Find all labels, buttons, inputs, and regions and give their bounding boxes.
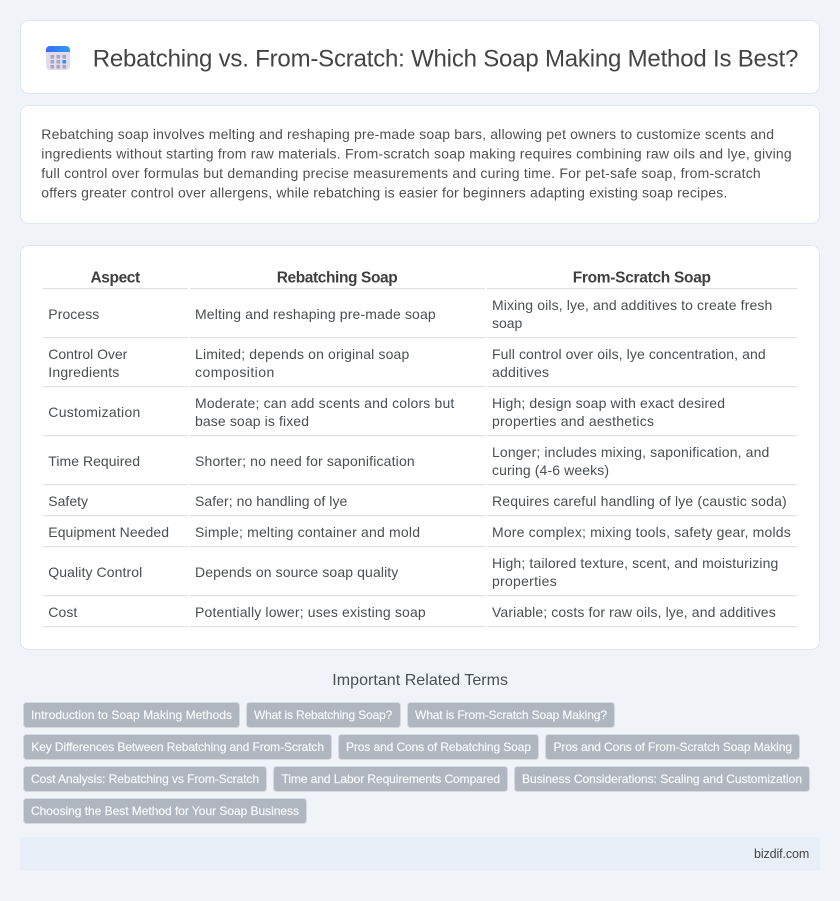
row: control over ingredients bbox=[48, 346, 766, 380]
row: customization: Moderate; can add scents and colors but bbox=[195, 395, 454, 411]
row: control over ingredients: Full control over oils, lye concentration, and bbox=[492, 346, 766, 362]
table header row bbox=[90, 270, 711, 287]
row: process: Melting and reshaping pre-made soap bbox=[195, 306, 436, 322]
row: quality control: Quality Control bbox=[48, 564, 142, 580]
title: Rebatching vs. From-Scratch: Which Soap Making Method Is Best? bbox=[93, 46, 798, 72]
row: time required: Time Required bbox=[48, 453, 140, 469]
row: time required: Shorter; no need for saponification bbox=[195, 453, 415, 469]
row: safety: Safety bbox=[48, 493, 88, 509]
row: process: Mixing oils, lye, and additives to create fresh bbox=[492, 297, 772, 313]
row: quality control: Depends on source soap quality bbox=[195, 564, 398, 580]
row: customization: High; design soap with exact desired bbox=[492, 395, 725, 411]
tag bbox=[246, 702, 400, 728]
row: customization bbox=[48, 395, 725, 429]
row: control over ingredients: composition bbox=[195, 364, 274, 380]
text block: description paragraph: Rebatching soap involves melting and reshaping pre-made soap bars, allowing pet owners to customize scents and bbox=[41, 126, 774, 142]
row: cost: Variable; costs for raw oils, lye, and additives bbox=[492, 604, 776, 620]
tag bbox=[24, 702, 240, 728]
row: customization: properties and aesthetics bbox=[492, 413, 654, 429]
row: time required: curing (4-6 weeks) bbox=[492, 462, 609, 478]
row: quality control: High; tailored texture, scent, and moisturizing bbox=[492, 555, 778, 571]
row: cost: Potentially lower; uses existing soap bbox=[195, 604, 426, 620]
row: customization: Customization bbox=[48, 404, 140, 420]
panel: title header bbox=[20, 20, 820, 94]
table header row: Aspect bbox=[90, 270, 140, 287]
text block: description paragraph bbox=[41, 126, 792, 200]
panel: related term tags bbox=[24, 702, 810, 824]
tag bbox=[24, 734, 332, 760]
row: safety: Safer; no handling of lye bbox=[195, 493, 348, 509]
tag bbox=[514, 766, 810, 792]
row: equipment needed: Equipment Needed bbox=[48, 524, 169, 540]
tag bbox=[338, 734, 538, 760]
text block: description paragraph: offers greater control over allergens, while rebatching is easier for beginners adapting existing soap recipes. bbox=[41, 184, 727, 200]
row: customization: base soap is fixed bbox=[195, 413, 309, 429]
panel: comparison table bbox=[20, 246, 820, 650]
tag: Business Considerations: Scaling and Customization bbox=[522, 772, 802, 786]
footer bar bbox=[20, 837, 820, 871]
row: process bbox=[48, 297, 772, 331]
row: time required: Longer; includes mixing, saponification, and bbox=[492, 444, 769, 460]
row: cost: Cost bbox=[48, 604, 77, 620]
tag: Introduction to Soap Making Methods bbox=[31, 708, 232, 722]
tag bbox=[408, 702, 614, 728]
row: process: soap bbox=[492, 315, 523, 331]
row: equipment needed bbox=[48, 524, 791, 540]
footer credit: bizdif.com bbox=[754, 847, 809, 861]
row: safety bbox=[48, 493, 787, 509]
panel: description bbox=[20, 106, 820, 224]
row: quality control bbox=[48, 555, 778, 589]
tag: Cost Analysis: Rebatching vs From-Scratch bbox=[31, 772, 259, 786]
icon: calendar grid bbox=[46, 46, 70, 70]
row: control over ingredients: additives bbox=[492, 364, 549, 380]
tag: Key Differences Between Rebatching and From-Scratch bbox=[31, 740, 324, 754]
tag: What is From-Scratch Soap Making? bbox=[415, 708, 607, 722]
tag: Time and Labor Requirements Compared bbox=[282, 772, 500, 786]
row: equipment needed: More complex; mixing tools, safety gear, molds bbox=[492, 524, 791, 540]
row: equipment needed: Simple; melting container and mold bbox=[195, 524, 420, 540]
row: quality control: properties bbox=[492, 573, 557, 589]
row: control over ingredients: Control Over bbox=[48, 346, 128, 362]
table header row: From-Scratch Soap bbox=[573, 270, 711, 287]
tag: What is Rebatching Soap? bbox=[254, 708, 393, 722]
heading: important related terms: Important Related Terms bbox=[332, 672, 508, 689]
row: safety: Requires careful handling of lye (caustic soda) bbox=[492, 493, 787, 509]
tag bbox=[546, 734, 800, 760]
tag bbox=[274, 766, 508, 792]
table header row: Rebatching Soap bbox=[277, 270, 398, 287]
row: control over ingredients: Ingredients bbox=[48, 364, 119, 380]
tag: Pros and Cons of Rebatching Soap bbox=[346, 740, 531, 754]
tag bbox=[24, 766, 266, 792]
tag: Pros and Cons of From-Scratch Soap Making bbox=[554, 740, 792, 754]
tag bbox=[24, 798, 306, 824]
row: control over ingredients: Limited; depends on original soap bbox=[195, 346, 410, 362]
text block: description paragraph: full control over formulas but demanding precise measurements and curing time. For pet-safe soap, from-scratch bbox=[41, 165, 761, 181]
row: time required bbox=[48, 444, 769, 478]
tag: Choosing the Best Method for Your Soap Business bbox=[31, 804, 299, 818]
text block: description paragraph: ingredients without starting from raw materials. From-scratch soap making requires combining raw oils and lye, giving bbox=[41, 145, 792, 161]
row: process: Process bbox=[48, 306, 99, 322]
row: cost bbox=[48, 604, 776, 620]
